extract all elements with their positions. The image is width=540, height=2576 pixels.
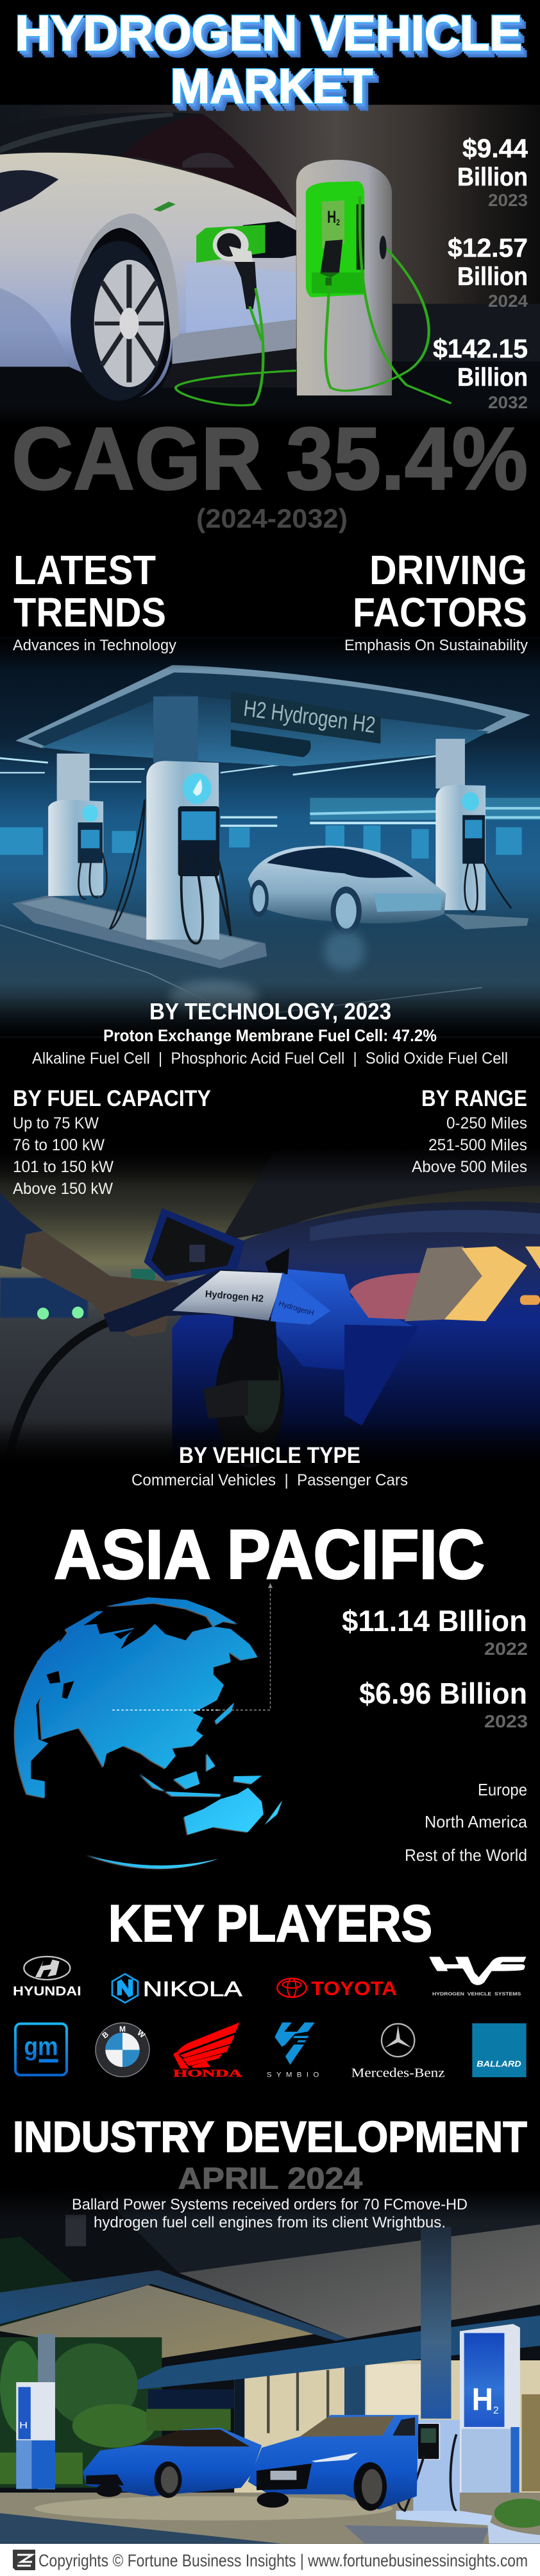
title: MARKET — [174, 64, 376, 118]
segment: by technology: Alkaline Fuel Cell | Phosphoric Acid Fuel Cell | Solid Oxide Fuel Cell — [32, 1050, 508, 1068]
regional stats: $11.14 BIllion — [342, 1604, 527, 1638]
segment: by range: BY RANGE — [421, 1086, 527, 1111]
market value stats: Billion — [457, 163, 528, 191]
title: MARKET — [171, 59, 373, 113]
pillar right H2: 2 — [493, 2405, 499, 2416]
logo: BMW — [96, 2023, 149, 2077]
hydrogen sign — [231, 691, 380, 757]
pillar right H2: H — [472, 2382, 493, 2417]
segment: by technology: Proton Exchange Membrane Fuel Cell: 47.2% — [103, 1026, 437, 1045]
logo: Honda — [173, 2023, 242, 2079]
regional stats: $6.96 Billion — [359, 1677, 527, 1710]
pillar left H2: H — [19, 2419, 28, 2430]
dashed locator arrow — [112, 1583, 273, 1710]
photo 1 H2 label: H — [327, 207, 340, 227]
market value stats: $9.44 — [462, 134, 528, 163]
footer logo — [13, 2550, 35, 2570]
building glass — [234, 2360, 540, 2496]
segment: by vehicle type: BY VEHICLE TYPE — [179, 1443, 360, 1468]
wheel — [215, 1328, 284, 1467]
photo 3 top fade — [0, 1148, 540, 1186]
title: HYDROGEN VEHICLE — [21, 12, 528, 67]
regional stats: 2022 — [484, 1639, 528, 1659]
market value stats: Billion — [457, 363, 528, 392]
charging flap — [144, 1208, 289, 1281]
industry development text: hydrogen fuel cell engines from its client Wrightbus. — [94, 2214, 446, 2231]
segment: by fuel capacity — [13, 1086, 211, 1198]
market value stats: $12.57 — [448, 233, 528, 263]
pillar left H2 — [16, 2382, 55, 2489]
logo: Mercedes-Benz — [351, 2024, 445, 2080]
market value stats: 2023 — [488, 191, 528, 210]
segment: by vehicle type — [131, 1443, 408, 1489]
nozzle — [103, 1269, 331, 1332]
segment: by fuel capacity: 76 to 100 kW — [13, 1136, 105, 1154]
photo: hydrogen station with two blue cars — [0, 2190, 540, 2544]
green port — [153, 202, 296, 309]
section: latest trends: LATEST — [13, 547, 156, 593]
logo: Nikola: NIKOLA — [143, 1976, 242, 2000]
logo: Toyota — [277, 1978, 397, 2000]
photo: white hydrogen car at charging station — [0, 105, 540, 424]
logo: Honda: HONDA — [173, 2068, 242, 2079]
segment: by fuel capacity: Above 150 kW — [13, 1180, 113, 1198]
photo: hand plugging hydrogen nozzle into blue car — [0, 1149, 540, 1467]
canopy — [15, 665, 530, 766]
section: latest trends: Advances in Technology — [13, 637, 176, 654]
section: latest trends: TRENDS — [13, 589, 166, 635]
date: APRIL 2024 — [178, 2162, 362, 2197]
industry development text: Ballard Power Systems received orders for 70 FCmove-HD — [72, 2196, 468, 2213]
front blue car — [248, 2415, 418, 2511]
pump right — [435, 785, 511, 912]
logo: HVS: HYDROGEN VEHICLE SYSTEMS — [432, 1991, 521, 1997]
logo: Nikola — [112, 1974, 242, 2003]
charger — [396, 2420, 493, 2525]
pump main — [110, 761, 231, 944]
platform — [12, 895, 267, 969]
hydrogen sign: H2 Hydrogen H2 — [242, 696, 376, 738]
photo 4 top fade — [0, 2189, 540, 2221]
nozzle: Hydrogen H2 — [205, 1288, 264, 1304]
regional stats — [342, 1604, 528, 1731]
title: MARKET — [173, 62, 375, 116]
photo 2 top fade — [0, 638, 540, 670]
nozzle: HydrogenH — [278, 1299, 315, 1317]
back wall lights — [0, 751, 540, 827]
title: MARKET — [171, 59, 373, 113]
segment: by range: Above 500 Miles — [412, 1158, 527, 1176]
globe map — [15, 1597, 282, 1869]
segment: by range: 251-500 Miles — [428, 1136, 527, 1154]
green screen panel — [306, 181, 364, 297]
section: latest trends — [13, 547, 176, 654]
section: driving factors: Emphasis On Sustainability — [344, 637, 528, 654]
section: driving factors: DRIVING — [369, 547, 527, 593]
title: MARKET — [176, 66, 378, 120]
market value stats — [433, 134, 528, 412]
floor — [0, 2493, 540, 2544]
title — [15, 6, 528, 120]
segment: by range: 0-250 Miles — [446, 1114, 527, 1132]
heading: key players: KEY PLAYERS — [108, 1895, 432, 1953]
market value stats: 2024 — [488, 291, 528, 311]
logo: Toyota: TOYOTA — [311, 1978, 397, 2000]
rear blue car — [83, 2428, 262, 2498]
segment: by technology — [32, 998, 508, 1068]
logo: Symbio — [267, 2023, 319, 2079]
segment: by fuel capacity: Up to 75 KW — [13, 1114, 99, 1132]
photo 3 bottom fade — [0, 1422, 540, 1464]
other regions list — [405, 1780, 528, 1865]
logo: Ballard — [472, 2023, 527, 2077]
other regions list: North America — [425, 1812, 528, 1831]
taillight — [350, 1247, 540, 1321]
photo 1 bottom fade — [0, 404, 540, 425]
sleeve and hand — [0, 1193, 179, 1337]
planter — [487, 2498, 540, 2543]
logo: Hyundai: HYUNDAI — [13, 1984, 81, 1998]
floor reflection — [324, 930, 365, 971]
heading: Asia Pacific: ASIA PACIFIC — [54, 1516, 485, 1594]
CAGR period: (2024-2032) — [196, 503, 348, 533]
pump left — [48, 800, 106, 899]
title: HYDROGEN VEHICLE — [15, 6, 522, 61]
segment: by fuel capacity: BY FUEL CAPACITY — [13, 1086, 211, 1111]
other regions list: Rest of the World — [405, 1846, 527, 1865]
wheel — [71, 241, 167, 401]
logo: BMW: W — [135, 2028, 148, 2040]
logo: Ballard: BALLARD — [477, 2059, 521, 2068]
segment: by vehicle type: Commercial Vehicles | Passenger Cars — [131, 1471, 408, 1489]
logo: BMW: M — [119, 2025, 126, 2034]
segment: by technology: BY TECHNOLOGY, 2023 — [149, 998, 391, 1024]
section: driving factors — [344, 547, 528, 654]
other regions list: Europe — [478, 1780, 527, 1799]
logo: HVS — [429, 1957, 527, 1997]
logo: GM — [15, 2024, 67, 2075]
logo: Symbio: SYMBIO — [267, 2071, 319, 2079]
silver concept car — [248, 846, 446, 935]
title: HYDROGEN VEHICLE — [17, 8, 524, 64]
logo: GM: gm — [24, 2033, 58, 2061]
CAGR headline: CAGR 35.4% — [12, 410, 528, 508]
logo: BMW: B — [101, 2030, 110, 2040]
market value stats: Billion — [457, 263, 528, 291]
segment: by range — [412, 1086, 527, 1176]
footer bar — [0, 2544, 540, 2576]
cable — [8, 1321, 110, 1464]
title: HYDROGEN VEHICLE — [19, 10, 526, 65]
regional stats: 2023 — [484, 1711, 528, 1731]
photo: hydrogen refuelling station — [0, 637, 540, 1037]
trees — [0, 2337, 234, 2487]
market value stats: $142.15 — [433, 334, 528, 363]
market value stats: 2032 — [488, 393, 528, 412]
logo: Hyundai — [13, 1957, 81, 1998]
industry development text — [72, 2196, 468, 2231]
photo 2 bottom fade — [0, 982, 540, 1037]
pillar right H2 — [460, 2324, 520, 2516]
title: HYDROGEN VEHICLE — [15, 6, 522, 61]
segment: by fuel capacity: 101 to 150 kW — [13, 1158, 114, 1176]
logo: Mercedes-Benz: Mercedes-Benz — [351, 2066, 445, 2080]
photo 1 H2 label: 2 — [336, 217, 340, 227]
